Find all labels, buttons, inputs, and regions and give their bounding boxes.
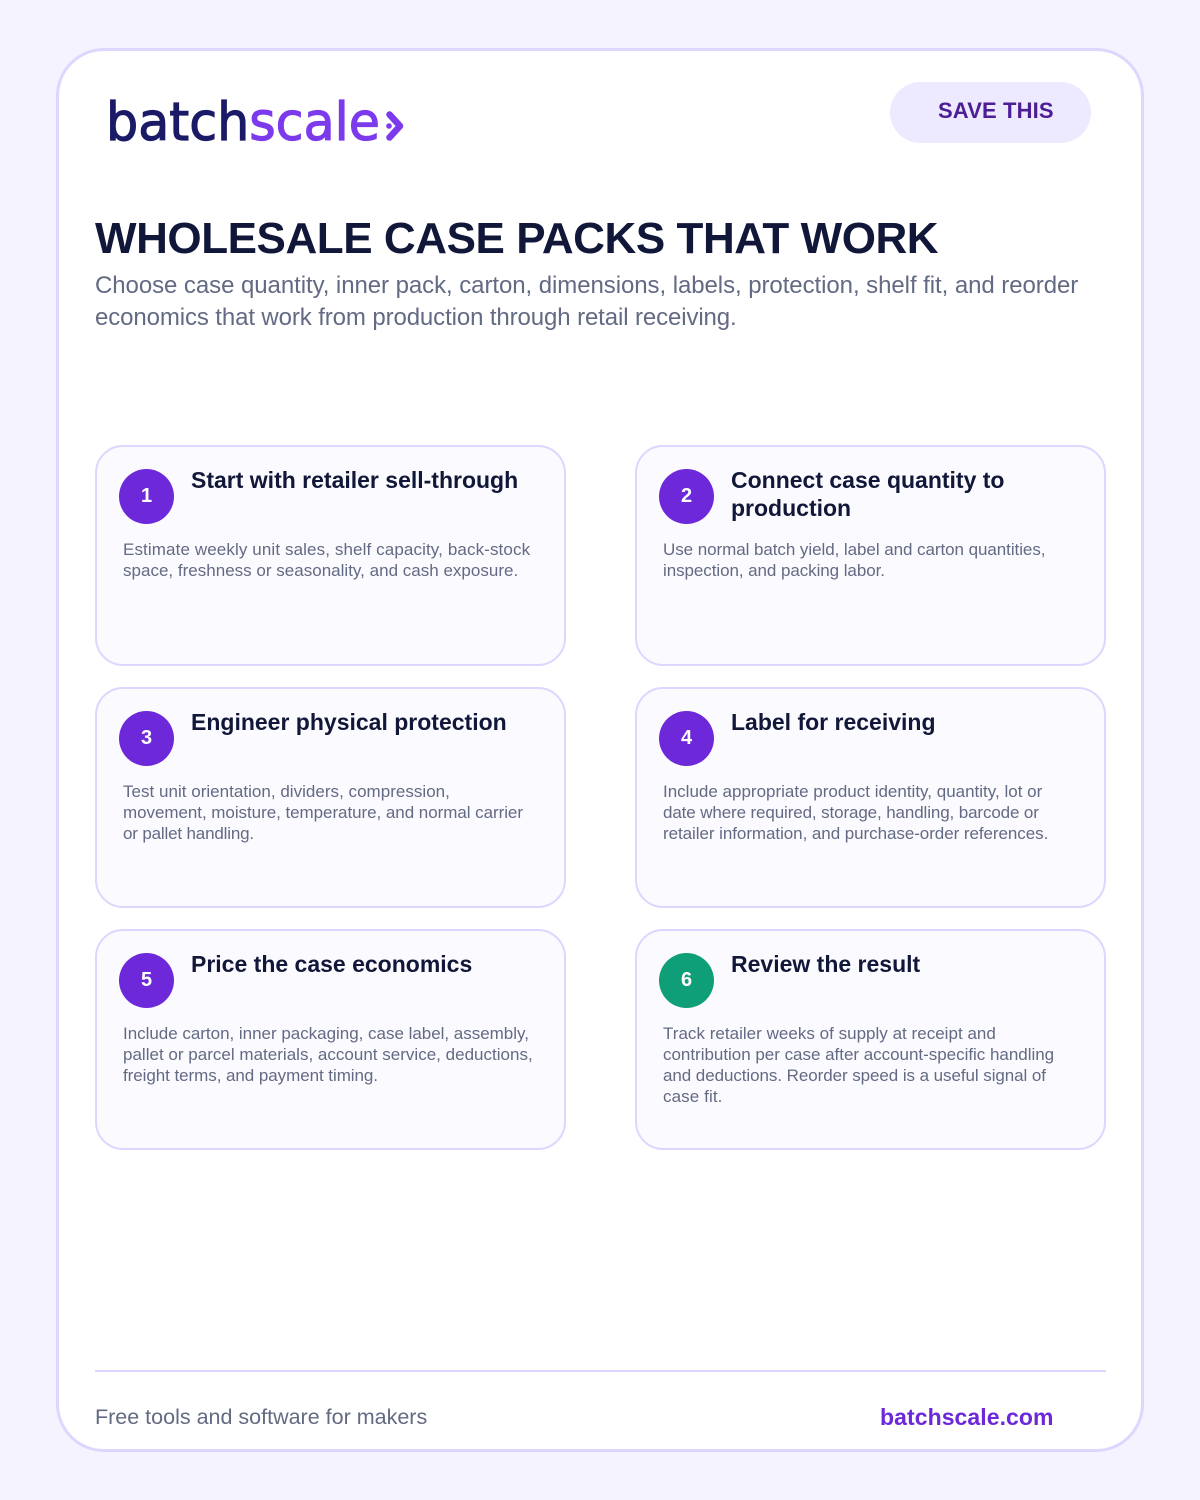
panel: step 4 [635, 687, 1106, 908]
panel: step 5 [95, 929, 566, 1150]
panel: step 5: Price the case economics [191, 951, 472, 977]
panel: step 1: space, freshness or seasonality, and cash exposure. [123, 561, 518, 580]
panel: step 6: and deductions. Reorder speed is a useful signal of [663, 1066, 1046, 1085]
panel: step 4: Label for receiving [731, 709, 936, 735]
panel: step 6: case fit. [663, 1087, 722, 1106]
panel: step 3: 3 [141, 727, 152, 749]
panel: step 2: Use normal batch yield, label and carton quantities, [663, 540, 1045, 559]
panel: step 3 [95, 687, 566, 908]
title: WHOLESALE CASE PACKS THAT WORK [95, 214, 938, 263]
panel: step 6: Track retailer weeks of supply at receipt and [663, 1024, 996, 1043]
panel: step 5: 5 [141, 969, 152, 991]
panel: step 3: Engineer physical protection [191, 709, 507, 735]
panel: step 1 [95, 445, 566, 666]
panel: step 3: Test unit orientation, dividers, compression, [123, 782, 450, 801]
footer url: batchscale.com [880, 1404, 1054, 1430]
subtitle: economics that work from production through retail receiving. [95, 304, 737, 331]
save this badge [890, 82, 1091, 143]
panel: step 4: date where required, storage, handling, barcode or [663, 803, 1039, 822]
subtitle [95, 272, 1078, 331]
panel: step 1: Estimate weekly unit sales, shelf capacity, back-stock [123, 540, 530, 559]
footer tagline: Free tools and software for makers [95, 1405, 427, 1429]
footer divider [95, 1370, 1106, 1372]
panel: step 1: 1 [141, 485, 152, 507]
panel: step 4: 4 [681, 727, 692, 749]
panel: step 6: Review the result [731, 951, 920, 977]
logo: batchscale [106, 92, 380, 153]
panel: step 4: retailer information, and purchase-order references. [663, 824, 1048, 843]
panel: step 2: 2 [681, 485, 692, 507]
subtitle: Choose case quantity, inner pack, carton, dimensions, labels, protection, shelf fit, and reorder [95, 272, 1078, 299]
panel: step 6 [635, 929, 1106, 1150]
panel: step 2 [635, 445, 1106, 666]
panel: step 6: contribution per case after account-specific handling [663, 1045, 1054, 1064]
panel: step 4: Include appropriate product identity, quantity, lot or [663, 782, 1042, 801]
panel: step 5: Include carton, inner packaging, case label, assembly, [123, 1024, 529, 1043]
panel: step 5: pallet or parcel materials, account service, deductions, [123, 1045, 533, 1064]
panel: step 5: freight terms, and payment timing. [123, 1066, 378, 1085]
panel: step 1: Start with retailer sell-through [191, 467, 518, 493]
panel: step 3: or pallet handling. [123, 824, 254, 843]
panel: step 2: Connect case quantity to production [731, 467, 1004, 521]
panel: step 2: inspection, and packing labor. [663, 561, 885, 580]
panel: step 3: movement, moisture, temperature, and normal carrier [123, 803, 523, 822]
panel: step 6: 6 [681, 969, 692, 991]
save this badge: SAVE THIS [938, 98, 1054, 123]
